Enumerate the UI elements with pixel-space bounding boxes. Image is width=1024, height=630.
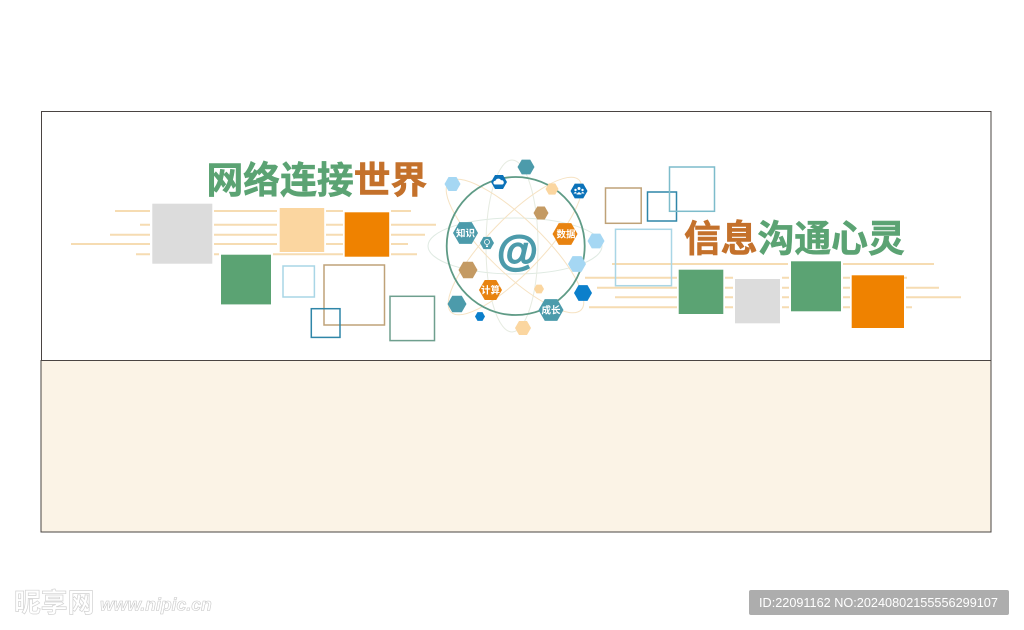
orbit lines <box>428 160 602 332</box>
watermark: id badge: ID:22091162 NO:20240802155556299107 <box>759 596 998 610</box>
orange square <box>345 212 389 257</box>
node: 知识: 知识 <box>456 227 475 239</box>
at sign: @ <box>497 227 538 274</box>
light blue outline square <box>616 229 672 286</box>
tan outline square <box>606 188 641 223</box>
peach square <box>280 208 324 252</box>
node: 计算: 计算 <box>481 284 500 296</box>
green square <box>221 255 271 304</box>
heading: right slogan: 信息沟通心灵 <box>684 218 905 260</box>
globe network graphic <box>428 160 604 335</box>
orange square <box>852 275 904 328</box>
watermark: site url: www.nipic.cn <box>100 594 212 614</box>
hexagon nodes <box>444 160 604 335</box>
watermark: site logo: 昵享网 <box>14 588 94 618</box>
right square group <box>606 167 904 328</box>
watermark: id badge <box>749 590 1009 615</box>
node: 数据 <box>552 223 578 245</box>
light blue outline square <box>283 266 314 297</box>
tan outline square <box>324 265 384 325</box>
green square <box>679 270 723 314</box>
node: 数据: 数据 <box>556 228 576 240</box>
icon: light bulb hexagon <box>480 237 494 249</box>
gray square <box>152 204 212 264</box>
globe circle <box>447 177 585 315</box>
panel: upper wall frame <box>42 112 991 360</box>
heading: left slogan: 网络连接世界 <box>206 160 427 201</box>
node: 计算 <box>479 280 502 300</box>
panel: lower beige band <box>41 360 991 532</box>
gray square <box>735 279 780 323</box>
left square group <box>152 204 435 341</box>
icon: people hexagon <box>570 184 588 198</box>
node: 成长: 成长 <box>541 304 561 316</box>
icon: cloud hexagon <box>491 175 507 189</box>
large green square <box>791 261 841 311</box>
node: 知识 <box>453 222 478 244</box>
right horizontal lines <box>585 264 961 307</box>
green gray outline square <box>390 296 434 341</box>
left horizontal lines <box>71 211 436 254</box>
node: 成长 <box>538 299 564 321</box>
teal outline square <box>670 167 714 211</box>
dark teal outline square <box>648 192 676 221</box>
dark teal outline square <box>311 309 340 337</box>
